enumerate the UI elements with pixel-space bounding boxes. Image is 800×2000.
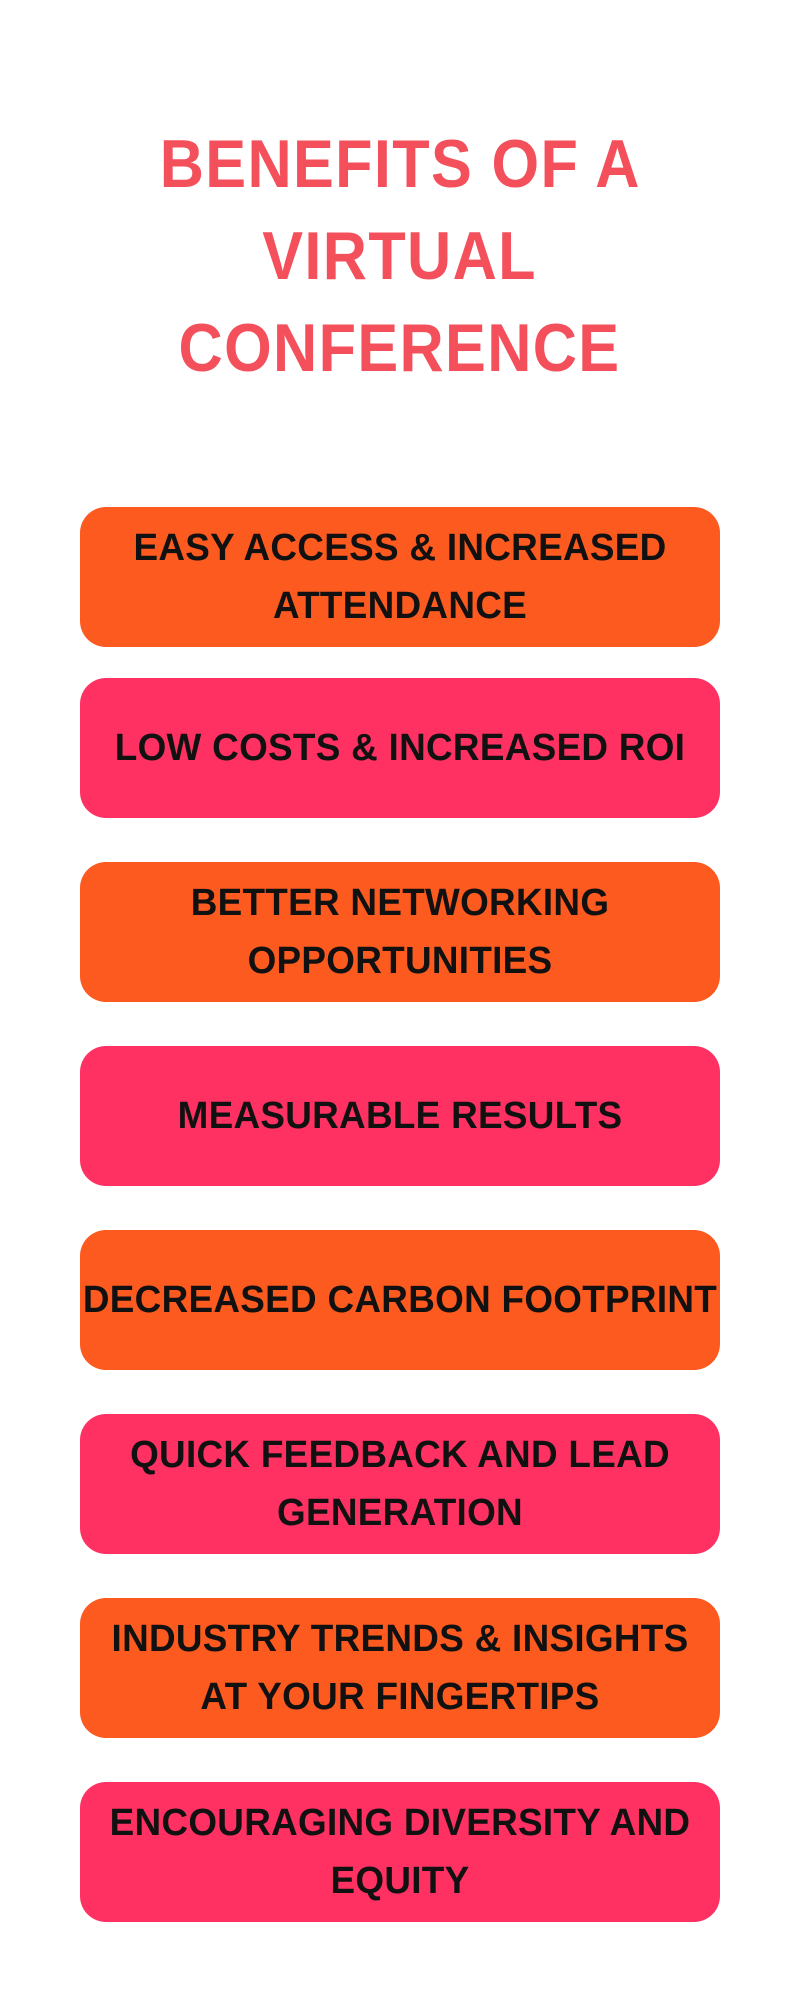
title: CONFERENCE (179, 310, 621, 386)
panel: feedback: GENERATION (277, 1492, 523, 1534)
panel: measurable results (80, 1046, 720, 1186)
panel: carbon footprint (80, 1230, 720, 1370)
panel: feedback (80, 1414, 720, 1554)
title: VIRTUAL (263, 218, 537, 294)
panel: diversity: EQUITY (331, 1860, 469, 1902)
panel: measurable results: MEASURABLE RESULTS (178, 1095, 622, 1137)
panel: feedback: QUICK FEEDBACK AND LEAD (130, 1434, 670, 1476)
panel: diversity (80, 1782, 720, 1922)
panel: low costs (80, 678, 720, 818)
panel: networking (80, 862, 720, 1002)
panel: easy access: EASY ACCESS & INCREASED (133, 527, 667, 569)
panel: easy access (80, 507, 720, 647)
title: BENEFITS OF A (159, 126, 641, 202)
panel: industry trends: AT YOUR FINGERTIPS (200, 1676, 600, 1718)
panel: networking: BETTER NETWORKING (191, 882, 609, 924)
panel: industry trends (80, 1598, 720, 1738)
panel: industry trends: INDUSTRY TRENDS & INSIGHTS (112, 1618, 688, 1660)
title (159, 126, 641, 386)
panel: diversity: ENCOURAGING DIVERSITY AND (110, 1802, 690, 1844)
panel: low costs: LOW COSTS & INCREASED ROI (115, 727, 685, 769)
panel: networking: OPPORTUNITIES (248, 940, 552, 982)
panel: easy access: ATTENDANCE (273, 585, 527, 627)
panel: carbon footprint: DECREASED CARBON FOOTPRINT (83, 1279, 717, 1321)
